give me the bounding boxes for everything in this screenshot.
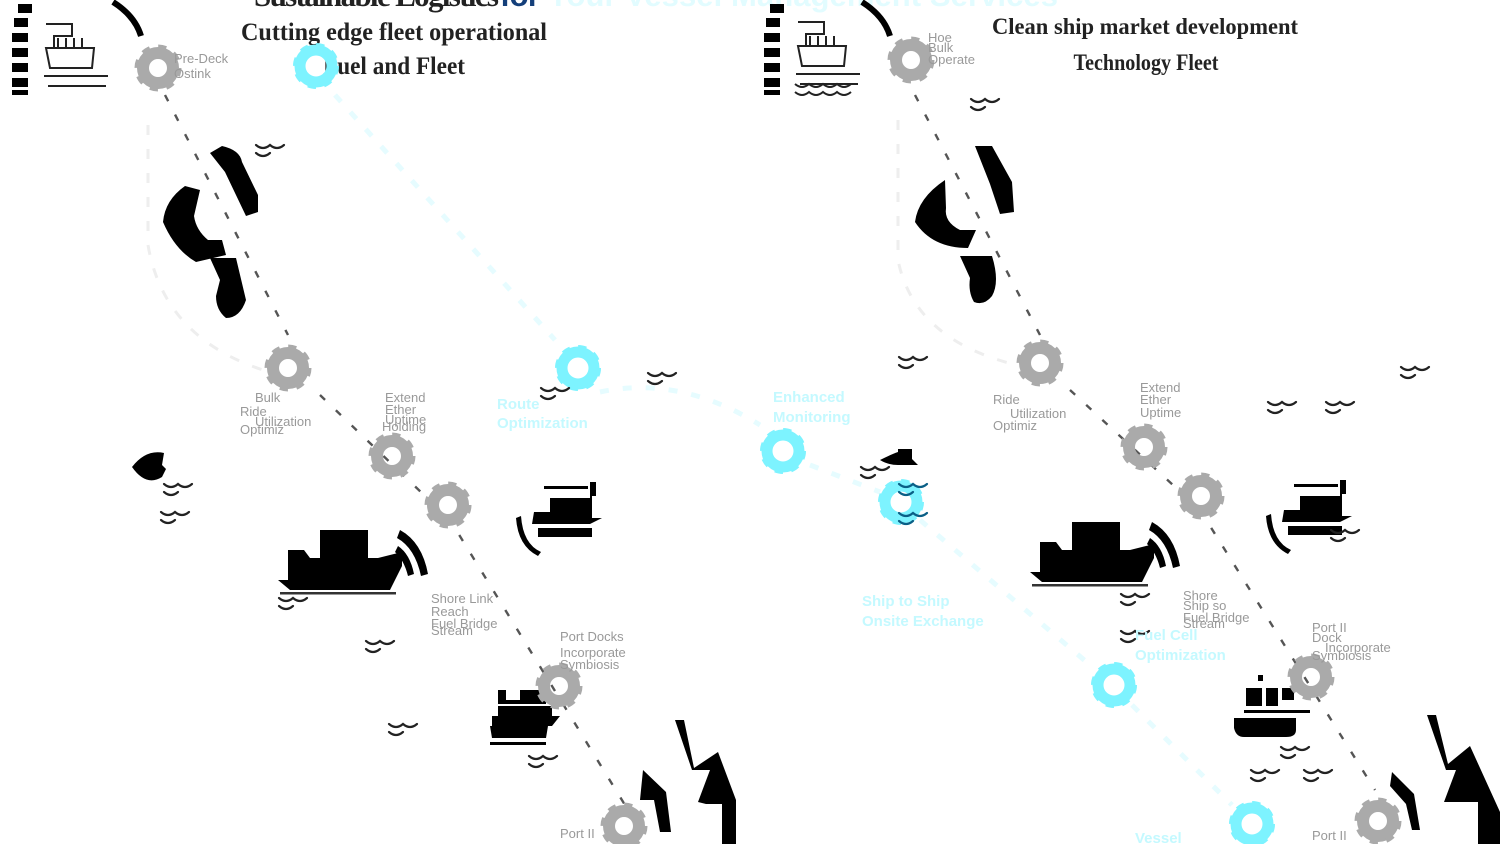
ship: lower left vessel — [482, 690, 560, 745]
labels: grey left callouts: Fuel Bridge — [431, 616, 497, 631]
labels: grey left callouts: Pre-Deck — [174, 51, 229, 66]
route: right grey dotted path — [915, 95, 1375, 790]
gears: cyan process nodes — [296, 46, 1272, 844]
labels: grey left callouts: Stream — [431, 623, 473, 638]
labels: cyan callouts — [497, 389, 1226, 844]
icon: left circular ship badge — [12, 2, 141, 95]
labels: cyan callouts: Monitoring — [773, 409, 850, 426]
labels: grey left callouts: Ostink — [174, 66, 211, 81]
labels: grey left callouts: Ether — [385, 402, 417, 417]
intro text: left: Fuel and Fleet — [323, 53, 466, 80]
labels: grey left callouts: Port Docks — [560, 629, 624, 644]
labels: grey right callouts: Utilization — [1010, 406, 1066, 421]
labels: grey right callouts: Fuel Bridge — [1183, 610, 1249, 625]
labels: grey left callouts: Symbiosis — [560, 657, 620, 672]
labels: grey right callouts: Stream — [1183, 616, 1225, 631]
intro text: right: Technology Fleet — [1074, 50, 1219, 75]
labels: grey left callouts: Uptime — [385, 412, 426, 427]
labels: grey right callouts: Extend — [1140, 380, 1180, 395]
labels: grey left callouts: Reach — [431, 604, 469, 619]
labels: cyan callouts: Fuel Cell — [1135, 627, 1198, 644]
labels: cyan callouts: Optimization — [1135, 647, 1226, 664]
route: faint left loop — [148, 125, 280, 375]
ship: small right vessel — [1266, 480, 1352, 554]
labels: grey left callouts: Optimiz — [240, 422, 284, 437]
labels: grey left callouts: Incorporate — [560, 645, 626, 660]
labels: grey right callouts: Bulk — [928, 40, 954, 55]
ship: large left vessel — [278, 530, 428, 594]
labels: cyan callouts: Onsite Exchange — [862, 613, 984, 630]
labels: grey left callouts — [174, 51, 626, 672]
labels: grey right callouts: Ether — [1140, 392, 1172, 407]
ship: small left vessel — [516, 482, 602, 556]
icon: small black blob left — [132, 452, 166, 480]
labels: grey right callouts: Ship so — [1183, 598, 1226, 613]
labels: grey left callouts: Bulk — [255, 390, 281, 405]
labels: cyan callouts: Enhanced — [773, 389, 845, 406]
labels: grey right callouts: Optimiz — [993, 418, 1037, 433]
labels: cyan callouts: Optimization — [497, 415, 588, 432]
labels: grey right callouts: Symbiosis — [1312, 648, 1372, 663]
labels: grey right callouts: Dock — [1312, 630, 1342, 645]
labels: grey right callouts: Ride — [993, 392, 1020, 407]
intro text: left: Cutting edge fleet operational — [241, 19, 547, 46]
icon: right circular ship badge — [764, 2, 890, 95]
labels: grey right callouts: Port II — [560, 826, 595, 841]
waves: blue water marks over gear — [899, 484, 927, 524]
route: faint right loop — [898, 120, 1030, 368]
icon: small black blob centre — [880, 449, 918, 465]
labels: grey right callouts: Port II — [1312, 620, 1347, 635]
intro text: right: Clean ship market development — [992, 14, 1298, 39]
labels: grey right callouts: Hoe — [928, 30, 952, 45]
labels: grey left callouts: Utilization — [255, 414, 311, 429]
labels: grey right callouts: Incorporate — [1325, 640, 1391, 655]
labels: grey left callouts: Shore Link — [431, 591, 494, 606]
labels: grey left callouts: Ride — [240, 404, 267, 419]
black curved shapes: left cluster — [163, 146, 258, 318]
labels: grey left callouts: Extend — [385, 390, 425, 405]
route: left grey dotted path — [165, 95, 625, 805]
intro text: left — [241, 19, 547, 80]
labels: grey right callouts: Operate — [928, 52, 975, 67]
labels: grey left callouts: Holding — [382, 419, 426, 434]
ship: large right vessel — [1030, 522, 1180, 586]
black curved shapes: bottom centre — [640, 720, 736, 844]
waves: black water marks — [161, 99, 1429, 781]
labels: grey right callouts: Port II — [1312, 828, 1347, 843]
labels: cyan callouts: Ship to Ship — [862, 593, 950, 610]
labels: grey right callouts: Uptime — [1140, 405, 1181, 420]
labels: grey right callouts — [560, 30, 1391, 843]
route: cyan dotted path — [335, 95, 1232, 805]
ship: lower right vessel — [1234, 675, 1310, 737]
black curved shapes: right cluster — [915, 146, 1014, 303]
labels: cyan callouts: Route — [497, 396, 540, 413]
black curved shapes: bottom right — [1390, 715, 1500, 844]
labels: grey right callouts: Shore — [1183, 588, 1218, 603]
intro text: right — [992, 14, 1298, 75]
